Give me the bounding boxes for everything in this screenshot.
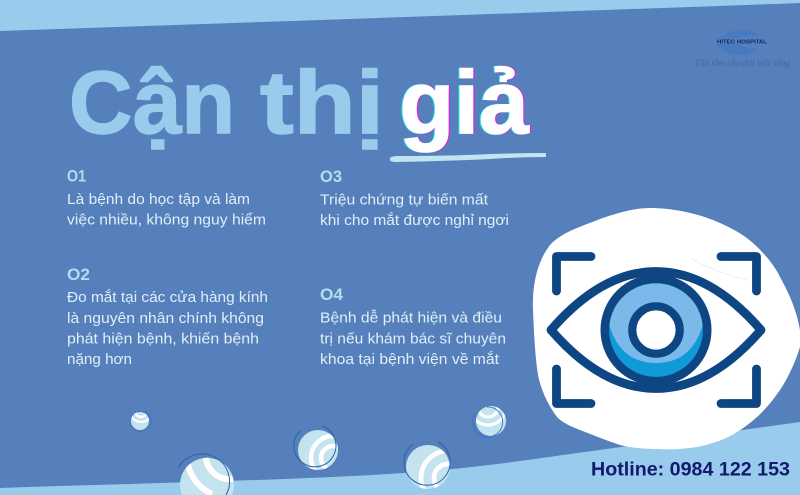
highlighted word: giả: giả: [398, 52, 529, 152]
item 01: [67, 166, 266, 228]
faint arc in blob: [690, 258, 747, 280]
bubble far right: [472, 406, 506, 438]
title: Cận: [69, 52, 235, 152]
item 01: việc nhiều, không nguy hiểm: [67, 212, 266, 228]
item 02: phát hiện bệnh, khiến bệnh: [67, 330, 259, 348]
focus brackets: [556, 256, 756, 404]
item 03: O3: [320, 167, 342, 186]
item 03: khi cho mắt được nghỉ ngơi: [320, 212, 509, 229]
item 02: nặng hơn: [67, 351, 132, 368]
logo: Hitec Hospital: Tận tâm cho đôi mắt sáng: [695, 58, 790, 68]
item 04: O4: [320, 285, 344, 304]
bottom light band: [0, 422, 800, 495]
title underline: [390, 153, 546, 162]
pupil: [632, 306, 680, 354]
item 04: khoa tại bệnh viện về mắt: [320, 351, 500, 368]
highlighted word: giả: giả: [400, 52, 530, 152]
icon: eye with focus brackets: [551, 256, 761, 404]
item 03: Triệu chứng tự biến mất: [320, 192, 489, 208]
title: [69, 52, 531, 152]
item 02: Đo mắt tại các cửa hàng kính: [67, 289, 268, 306]
item 01: O1: [67, 166, 86, 186]
item 01: Là bệnh do học tập và làm: [67, 191, 250, 208]
item 02: là nguyên nhân chính không: [67, 310, 264, 327]
item 04: trị nếu khám bác sĩ chuyên: [320, 330, 506, 348]
logo: Hitec Hospital: [695, 30, 790, 68]
logo: Hitec Hospital: HITEC HOSPITAL: [717, 40, 768, 46]
item 02: O2: [67, 265, 90, 284]
item 04: [320, 285, 506, 368]
item 02: [67, 265, 268, 368]
bubble small left: [130, 411, 152, 432]
white blob behind eye: [533, 208, 800, 449]
item 04: Bệnh dễ phát hiện và điều: [320, 310, 502, 326]
bubble bottom left: [178, 453, 234, 495]
bubble centre: [294, 426, 338, 470]
title: thị: [260, 52, 384, 152]
top light band: [0, 0, 800, 31]
bubble right centre: [404, 442, 450, 489]
hotline: Hotline: 0984 122 153: [591, 458, 790, 480]
eye outline: [551, 272, 761, 388]
iris: [608, 282, 704, 378]
highlighted word: giả: giả: [400, 52, 531, 152]
item 03: [320, 167, 509, 229]
